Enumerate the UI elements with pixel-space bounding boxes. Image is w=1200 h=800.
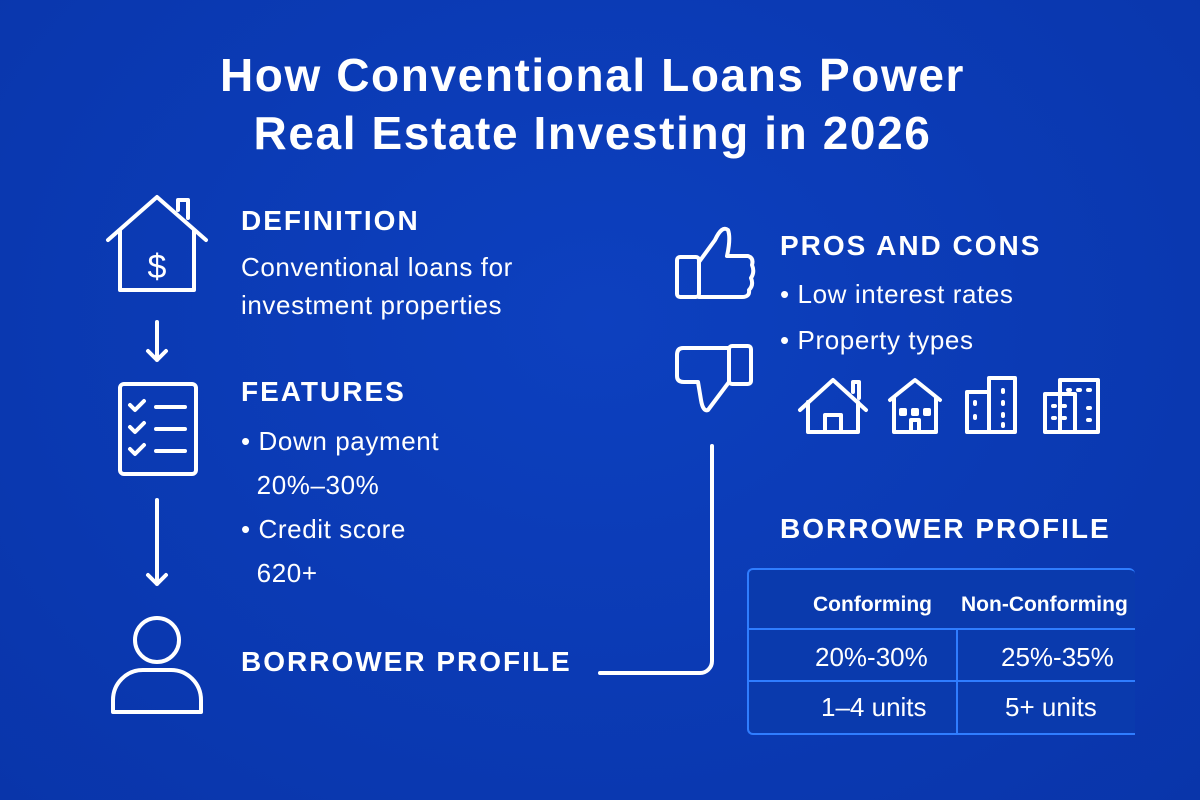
table header: Conforming bbox=[813, 593, 932, 616]
table row 1: 20%-30% bbox=[815, 642, 928, 672]
table row 2: 5+ units bbox=[1005, 692, 1097, 722]
table row 2 bbox=[821, 692, 1097, 722]
text: features list: • Down payment bbox=[241, 426, 439, 456]
table header: Non-Conforming bbox=[961, 593, 1128, 616]
arrow: down 1 bbox=[148, 322, 166, 360]
icon: checklist bbox=[120, 384, 196, 474]
table: borrower profile bbox=[747, 568, 1135, 735]
icons: property types bbox=[800, 378, 1098, 432]
title: Real Estate Investing in 2026 bbox=[254, 107, 931, 159]
icon: thumbs up bbox=[677, 229, 753, 297]
text: pros list: • Property types bbox=[780, 325, 974, 355]
text: features list: • Credit score bbox=[241, 514, 406, 544]
table header bbox=[749, 570, 1135, 630]
text: features list bbox=[241, 426, 439, 588]
table row 1 bbox=[749, 630, 1135, 682]
heading: features: FEATURES bbox=[241, 376, 406, 407]
title: How Conventional Loans Power bbox=[220, 49, 965, 101]
icon: thumbs down bbox=[677, 346, 751, 410]
icon: house with dollar bbox=[108, 197, 206, 290]
text: pros list bbox=[780, 279, 1014, 355]
text: pros list: • Low interest rates bbox=[780, 279, 1014, 309]
text: definition body bbox=[241, 252, 513, 320]
connector line bbox=[600, 446, 712, 673]
heading: pros and cons: PROS AND CONS bbox=[780, 230, 1041, 261]
table row 2: 1–4 units bbox=[821, 692, 927, 722]
heading: borrower profile left: BORROWER PROFILE bbox=[241, 646, 572, 677]
icon: house with dollar: $ bbox=[148, 248, 167, 286]
icon: person bbox=[113, 618, 201, 712]
title bbox=[220, 49, 965, 159]
heading: borrower profile right: BORROWER PROFILE bbox=[780, 513, 1111, 544]
table row 1: 25%-35% bbox=[1001, 642, 1114, 672]
arrow: down 2 bbox=[148, 500, 166, 584]
heading: definition: DEFINITION bbox=[241, 205, 420, 236]
text: definition body: investment properties bbox=[241, 290, 502, 320]
text: features list: 620+ bbox=[257, 558, 318, 588]
text: features list: 20%–30% bbox=[257, 470, 379, 500]
text: definition body: Conventional loans for bbox=[241, 252, 513, 282]
